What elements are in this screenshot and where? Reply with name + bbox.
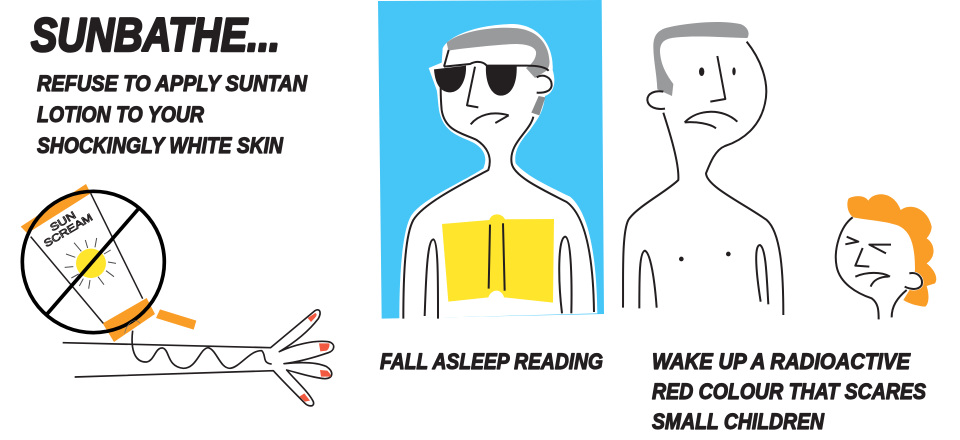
- hair: [447, 28, 549, 78]
- icon: bottle bottom band: [103, 298, 155, 342]
- text block: refuse suntan lotion: [37, 71, 308, 158]
- child ear: [905, 273, 922, 289]
- icon: bottle sides: [31, 193, 143, 323]
- icon: sunglasses: [434, 66, 517, 96]
- label: sun scream: [42, 210, 95, 250]
- caption: fall asleep reading: FALL ASLEEP READING: [380, 349, 603, 374]
- panel: fall asleep reading, man on blue towel: [378, 0, 604, 319]
- caption: wake up radioactive: [652, 349, 926, 434]
- outline: [623, 42, 783, 315]
- icon: bottle cap top: [21, 184, 91, 233]
- panel: burned man: [623, 22, 936, 319]
- illustration: crossed-out sun scream bottle and arm: [21, 184, 334, 406]
- child head lines: [836, 217, 922, 319]
- icon: sun: [65, 238, 116, 289]
- text block: refuse suntan lotion: SHOCKINGLY WHITE SKIN: [37, 133, 284, 158]
- icon: yellow book: [442, 214, 554, 303]
- icon: prohibition sign: [22, 191, 164, 333]
- text block: refuse suntan lotion: REFUSE TO APPLY SUNTAN: [37, 71, 308, 96]
- icon: arm and lotion squiggle: [63, 310, 334, 406]
- eyes and chest dots: [679, 67, 736, 261]
- sideburn: [531, 96, 545, 115]
- caption: wake up radioactive: WAKE UP A RADIOACTIVE: [652, 349, 911, 374]
- child hair: [847, 194, 936, 307]
- blue towel: [378, 0, 604, 319]
- child: screaming child with orange hair: [836, 194, 936, 319]
- caption: wake up radioactive: RED COLOUR THAT SCARES: [652, 379, 926, 404]
- hair: [653, 22, 749, 96]
- icon: bottle cap loose: [156, 309, 196, 330]
- body silhouette: [399, 24, 597, 319]
- title: SUNBATHE...: [31, 8, 280, 61]
- caption: wake up radioactive: SMALL CHILDREN: [652, 409, 825, 434]
- outline: [403, 50, 594, 319]
- text block: refuse suntan lotion: LOTION TO YOUR: [37, 102, 205, 127]
- label: sun scream: SUN: [49, 210, 78, 234]
- label: sun scream: SCREAM: [42, 212, 95, 250]
- icon: fingernails: [299, 313, 331, 402]
